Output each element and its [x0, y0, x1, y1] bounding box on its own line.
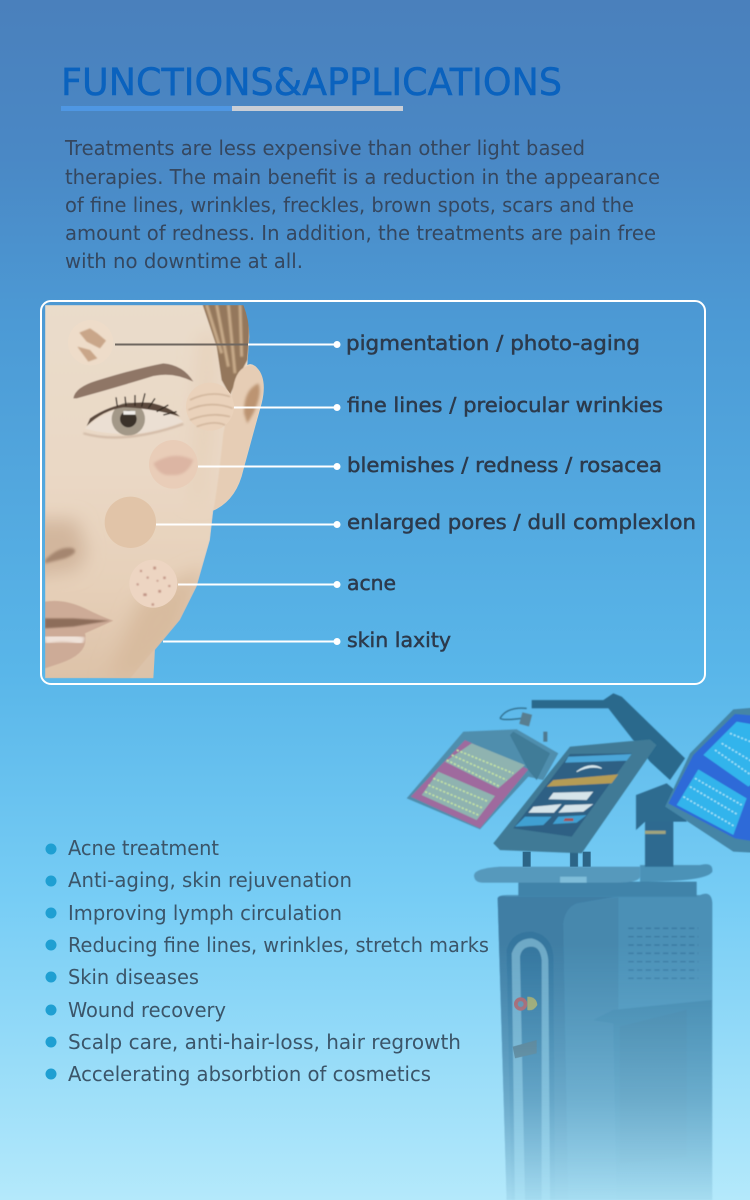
callout labels: blemishes / redness / rosacea	[347, 453, 662, 477]
benefits list	[46, 836, 489, 1086]
intro paragraph: of fine lines, wrinkles, freckles, brown spots, scars and the	[65, 193, 634, 217]
callout labels: fine lines / preiocular wrinkies	[347, 393, 663, 417]
panel border	[41, 301, 705, 684]
lips	[45, 601, 113, 668]
skin sample: acne	[129, 560, 177, 608]
intro paragraph: Treatments are less expensive than other light based	[64, 136, 585, 160]
list text: Anti-aging, skin rejuvenation	[68, 868, 352, 892]
intro paragraph: therapies. The main benefit is a reduction in the appearance	[65, 165, 660, 189]
list text: Scalp care, anti-hair-loss, hair regrowth	[68, 1030, 461, 1054]
title: FUNCTIONS&APPLICATIONS	[61, 61, 562, 104]
list text: Reducing fine lines, wrinkles, stretch marks	[68, 933, 489, 957]
face photo	[27, 305, 268, 678]
list text: Wound recovery	[68, 998, 226, 1022]
callout labels	[346, 331, 696, 652]
callout labels: enlarged pores / dull complexIon	[347, 510, 696, 534]
callout labels: pigmentation / photo-aging	[346, 331, 640, 355]
callout labels: acne	[347, 571, 396, 595]
right light panel	[665, 707, 750, 853]
touch screen	[493, 739, 657, 853]
list text: Improving lymph circulation	[68, 901, 342, 925]
machine cabinet	[498, 894, 712, 1200]
top plate	[474, 864, 712, 897]
skin sample: pigmentation	[68, 320, 113, 365]
intro paragraph: with no downtime at all.	[65, 249, 303, 273]
nose	[45, 548, 75, 563]
shading	[27, 520, 87, 577]
bullet icons	[46, 844, 56, 1080]
ear	[213, 365, 264, 511]
left light panel	[407, 729, 558, 829]
list text: Skin diseases	[68, 965, 199, 989]
eyebrow	[73, 363, 193, 398]
callout lines	[115, 341, 340, 645]
panel: skin concerns	[27, 301, 705, 684]
connector	[513, 1040, 537, 1058]
intro paragraph: amount of redness. In addition, the treatments are pain free	[65, 221, 656, 245]
column	[636, 783, 687, 867]
title underline	[61, 106, 403, 111]
arm	[500, 693, 685, 780]
hair	[203, 305, 249, 395]
list text: Accelerating absorbtion of cosmetics	[68, 1062, 431, 1086]
skin sample: blemishes	[149, 440, 198, 489]
skin sample: fine lines	[186, 383, 234, 431]
list text	[68, 836, 489, 1086]
emergency button	[514, 997, 537, 1011]
skin sample: enlarged pores	[105, 497, 156, 548]
machine illustration	[407, 693, 750, 1200]
callout labels: skin laxity	[347, 628, 451, 652]
screen feet	[523, 852, 591, 867]
eye	[86, 409, 182, 434]
intro paragraph	[64, 136, 660, 273]
list text: Acne treatment	[68, 836, 219, 860]
